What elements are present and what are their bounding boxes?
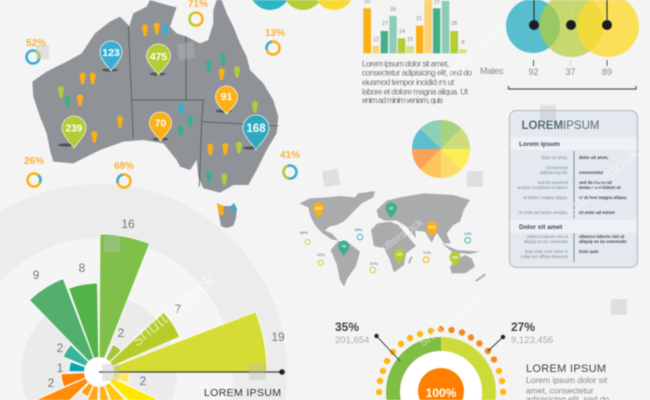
pin: 91 — [216, 86, 238, 114]
rose chart background rings — [0, 184, 287, 400]
donut stat: 41% — [280, 150, 300, 180]
world donut stats: 41% — [317, 252, 325, 257]
venn values: males: 37 — [565, 67, 576, 77]
pin: 239: 239 — [66, 124, 83, 134]
world pins: 475 — [429, 226, 435, 230]
watermark badges — [36, 42, 627, 381]
rose chart value labels: 16 — [121, 217, 135, 231]
donut stat: 71% — [188, 0, 208, 27]
callout: 35%: 35% — [335, 320, 359, 334]
bar chart: 15 — [407, 37, 413, 43]
world donut stats — [300, 227, 472, 273]
world pins — [313, 202, 460, 267]
donut stat: 26%: 26% — [24, 156, 44, 167]
rose chart — [17, 234, 267, 400]
panel: lorem ipsum table: Duis aute irure dolor in — [525, 249, 569, 254]
panel: lorem ipsum table: Duis aute — [579, 249, 599, 254]
rose chart hub — [84, 357, 114, 387]
pin: 168: 168 — [246, 123, 266, 135]
world pins: 97 — [389, 206, 393, 210]
rose chart pointer line — [99, 369, 285, 375]
donut stat: 13%: 13% — [265, 28, 285, 39]
venn values: males: Males: — [480, 66, 505, 76]
donut stat: 52%: 52% — [26, 38, 46, 49]
panel: lorem ipsum table: sed do eiusmod — [538, 180, 569, 185]
bar chart: 27 — [434, 0, 440, 6]
donut stat: 13% — [265, 28, 285, 56]
bar chart — [363, 0, 467, 53]
paragraph under bar chart: consectetur adipisicing elit, sed do — [362, 68, 472, 78]
rose chart value labels: 2 — [140, 374, 147, 388]
paragraph under bar chart: Lorem ipsum dolor sit amet, — [362, 58, 449, 68]
panel: lorem ipsum table: dolor sit amet, — [541, 155, 568, 160]
pin: 123: 123 — [102, 47, 120, 59]
panel heading: LOREMIPSUM — [522, 120, 599, 132]
icon group: Australia people markers — [58, 23, 258, 185]
donut stat: 69% — [114, 161, 134, 189]
bar chart: 8 — [461, 40, 465, 46]
panel: lorem ipsum table: tempor incididunt ut labore — [517, 185, 569, 190]
text block: lorem ipsum — [526, 363, 609, 400]
bar chart: 31 — [416, 16, 422, 22]
pin: 70: 70 — [155, 118, 166, 130]
rose chart caption: LOREM IPSUM — [204, 387, 281, 399]
bar chart: 12 — [373, 37, 379, 43]
paragraph under bar chart — [362, 58, 472, 105]
bar chart: 24 — [399, 29, 405, 35]
watermark text: shutterstock — [370, 216, 426, 260]
pin: 123 — [100, 41, 122, 72]
rose chart value labels: 1 — [57, 361, 64, 375]
callout: 35% — [335, 320, 400, 361]
watermark text — [127, 16, 642, 351]
panel: lorem ipsum table: aliquip ex ea commodo — [524, 239, 569, 244]
pin: 475 — [146, 44, 170, 76]
venn values: males: 92 — [528, 67, 539, 77]
world donut stats: 71% — [423, 250, 431, 255]
panel: lorem ipsum table — [510, 110, 638, 268]
panel: lorem ipsum table: ut dolore magna aliqua. — [579, 195, 627, 200]
callout: 27%: 9,123,456 — [511, 335, 553, 346]
panel: lorem ipsum table: tempor incididunt ut — [579, 185, 621, 190]
map: Australia — [32, 0, 278, 193]
rose chart value labels: 2 — [118, 326, 125, 340]
text block: lorem ipsum: Lorem ipsum dolor sit — [526, 375, 608, 385]
panel: lorem ipsum table: sed do eiusmod — [579, 180, 612, 185]
world pins: 121 — [396, 252, 402, 256]
pin: 91: 91 — [221, 91, 232, 103]
bracket — [508, 86, 636, 89]
bar chart: 28 — [451, 21, 457, 27]
donut stat: 52% — [24, 38, 46, 66]
panel: lorem ipsum table: aliquip ex ea commodo — [579, 239, 627, 244]
paragraph under bar chart: eiusmod tempor incididunt ut — [362, 77, 455, 87]
dotted ring — [376, 326, 506, 395]
paragraph under bar chart: enim ad minim veniam, quis — [362, 95, 443, 105]
pie chart — [412, 120, 470, 178]
paragraph under bar chart: labore et dolore magna aliqua. Ut — [362, 86, 469, 96]
panel: lorem ipsum table: ullamco laboris nisi ut — [579, 234, 625, 239]
text block: lorem ipsum: LOREM IPSUM — [526, 363, 606, 375]
donut chart: 100% — [426, 386, 457, 400]
rose chart value labels — [33, 217, 285, 390]
panel: lorem ipsum table: ullamco laboris nisi ut — [527, 234, 569, 239]
rose chart value labels: 19 — [271, 330, 285, 344]
world pins: 70 — [342, 244, 346, 248]
callout: 35%: 201,654 — [335, 335, 369, 346]
bar chart: 27 — [382, 21, 388, 27]
venn diagram — [506, 0, 639, 57]
pin: 168 — [243, 115, 269, 150]
pin: 475: 475 — [150, 51, 167, 63]
world donut stats: 28% — [354, 227, 363, 232]
donut stat: 69%: 69% — [114, 161, 134, 172]
watermark text: shutterstock — [127, 270, 220, 351]
bar chart: 35 — [390, 7, 396, 13]
panel: lorem ipsum table: consectetur — [579, 170, 604, 175]
world donut stats: 13% — [464, 231, 472, 236]
panel: lorem ipsum table: consectetur — [546, 165, 569, 170]
text block: lorem ipsum: amet, consectetur — [526, 386, 594, 396]
panel: lorem ipsum table: adipisicing elit, — [540, 170, 568, 175]
venn values: males — [480, 60, 612, 77]
rose chart value labels: 2 — [57, 341, 64, 355]
donut stat: 41%: 41% — [280, 150, 300, 161]
world pins: 239 — [316, 206, 322, 210]
world map — [299, 191, 486, 287]
callout: 27% — [488, 320, 553, 351]
watermark text: shutterstock — [415, 292, 487, 349]
world donut stats: 57% — [370, 261, 378, 266]
rose chart value labels: 7 — [175, 302, 182, 316]
top cropped circles — [250, 0, 354, 10]
Tasmania — [217, 203, 237, 228]
callout: 27%: 27% — [511, 320, 535, 334]
panel: lorem ipsum table: Ut enim ad minim veniam, — [518, 210, 568, 215]
panel: lorem ipsum table: culpa qui officia deserunt — [521, 254, 569, 259]
rose chart value labels: 9 — [33, 268, 40, 282]
donut chart — [386, 337, 496, 400]
venn values: males: 89 — [602, 67, 612, 77]
donut stat: 26% — [24, 156, 44, 189]
panel: lorem ipsum table: dolor sit amet, — [579, 155, 608, 160]
rose chart value labels: 2 — [48, 376, 55, 390]
world pins: 168 — [452, 256, 458, 260]
panel: lorem ipsum table: Dolor sit amet — [519, 224, 563, 231]
pin: 239 — [58, 116, 86, 148]
panel: lorem ipsum table: ut dolore magna aliqua. — [523, 195, 568, 200]
watermark text: shutterstock — [562, 143, 642, 220]
panel: lorem ipsum table: Ut enim ad minim — [579, 210, 615, 215]
world donut stats: 69% — [300, 230, 308, 235]
panel: lorem ipsum table: Lorem ipsum — [519, 141, 560, 148]
watermark text: shutterstock — [430, 16, 510, 93]
rose chart value labels: 8 — [79, 261, 86, 275]
pin: 70 — [150, 112, 172, 141]
